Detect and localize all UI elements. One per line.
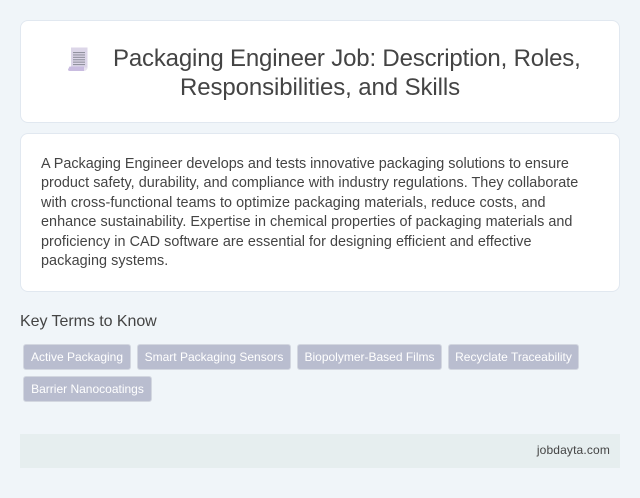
tag: Biopolymer-Based Films: Biopolymer-Based Films [304, 350, 435, 364]
description text: A Packaging Engineer develops and tests innovative packaging solutions to ensure [41, 156, 569, 172]
footer credit: jobdayta.com [537, 443, 610, 457]
tag: Smart Packaging Sensors: Smart Packaging Sensors [145, 350, 283, 364]
title line 1: Packaging Engineer Job: Description, Roles, [113, 45, 581, 72]
description text: packaging systems. [41, 253, 168, 269]
description text: proficiency in CAD software are essential for designing efficient and effective [41, 234, 532, 250]
tag: Barrier Nanocoatings: Barrier Nanocoatings [31, 382, 144, 396]
tag: Active Packaging: Active Packaging [31, 350, 123, 364]
tag: Smart Packaging Sensors [137, 344, 291, 370]
tag: Barrier Nanocoatings [23, 376, 152, 402]
tag: Recyclate Traceability: Recyclate Traceability [455, 350, 572, 364]
description text: enhance sustainability. Expertise in chemical properties of packaging materials and [41, 214, 572, 230]
heading: key terms: Key Terms to Know [20, 313, 157, 330]
panel: description card [20, 133, 620, 292]
panel: title card [20, 20, 620, 123]
tag: Active Packaging [23, 344, 131, 370]
icon: document scroll [68, 48, 88, 71]
description text: product safety, durability, and compliance with industry regulations. They collaborate [41, 175, 578, 191]
tag: Biopolymer-Based Films [297, 344, 442, 370]
footer bar [20, 434, 620, 468]
description text [41, 156, 578, 269]
description text: with cross-functional teams to optimize packaging materials, reduce costs, and [41, 195, 546, 211]
title line 2: Responsibilities, and Skills [180, 74, 460, 101]
tag: Recyclate Traceability [448, 344, 579, 370]
